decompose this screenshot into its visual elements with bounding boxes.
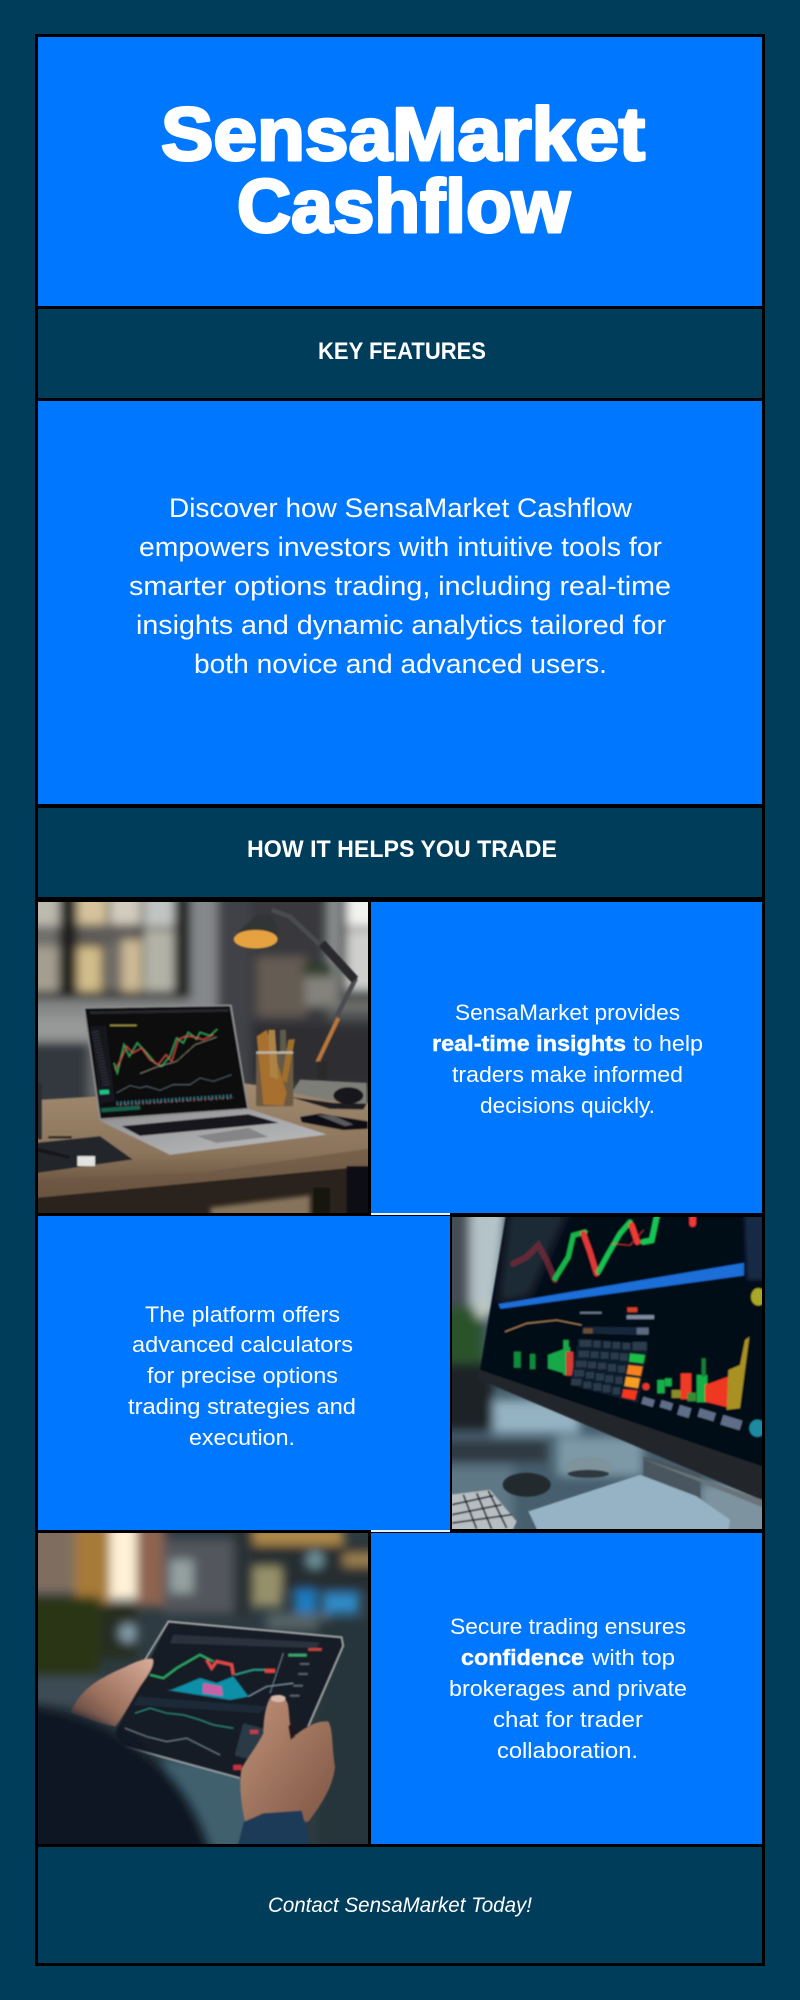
- lamp: [234, 910, 367, 1110]
- text: real-time insights: [432, 1000, 703, 1118]
- panel: how it helps heading: [38, 808, 762, 897]
- panel: introduction: [38, 401, 762, 804]
- tablet: [115, 1621, 343, 1779]
- text: real-time insights: traders make informed: [452, 1062, 683, 1087]
- intro text block: both novice and advanced users.: [194, 649, 607, 679]
- tablet charts: [167, 1676, 248, 1700]
- panel: footer: [38, 1847, 762, 1963]
- heading: how it helps you trade: HOW IT HELPS YOU TRADE: [247, 836, 557, 863]
- laptop: [83, 1004, 327, 1155]
- left hand: [71, 1659, 153, 1727]
- panel: real-time insights text: [371, 902, 762, 1213]
- intro text block: empowers investors with intuitive tools for: [139, 532, 662, 562]
- text: advanced calculators: The platform offers: [145, 1302, 340, 1327]
- pencil cup: [256, 1030, 295, 1106]
- panel: advanced calculators text: [38, 1216, 450, 1530]
- text: secure trading: confidence: [461, 1645, 584, 1670]
- calculator: [570, 1307, 654, 1403]
- text: secure trading: chat for trader: [493, 1707, 644, 1732]
- monitor stand: [643, 1456, 702, 1546]
- monitor: [477, 1200, 777, 1513]
- text: secure trading: Secure trading ensures: [450, 1614, 686, 1639]
- white divider: [371, 1213, 450, 1215]
- text: advanced calculators: [128, 1302, 356, 1450]
- text: real-time insights: decisions quickly.: [480, 1093, 655, 1118]
- text: secure trading: brokerages and private: [449, 1676, 687, 1701]
- notebook: [20, 1136, 133, 1175]
- text: real-time insights: to help: [633, 1031, 703, 1056]
- text: secure trading: with top: [591, 1645, 675, 1670]
- heading: key features: KEY FEATURES: [318, 338, 486, 365]
- intro text block: [129, 493, 671, 679]
- upper candle chart: [513, 1217, 693, 1280]
- text: real-time insights: SensaMarket provides: [455, 1000, 680, 1025]
- right hand: [240, 1695, 335, 1822]
- image: hands holding tablet: [38, 1533, 368, 1844]
- panel: secure trading text: [371, 1533, 762, 1844]
- text: advanced calculators: advanced calculators: [132, 1332, 353, 1357]
- intro text block: insights and dynamic analytics tailored for: [136, 610, 666, 640]
- shoulder silhouette: [20, 1703, 213, 1863]
- title: Cashflow: [237, 164, 571, 248]
- text: real-time insights: real-time insights: [432, 1031, 626, 1056]
- panel: title header: [38, 37, 762, 306]
- text: advanced calculators: trading strategies and: [128, 1394, 356, 1419]
- lower bars: [505, 1320, 749, 1430]
- text: secure trading: collaboration.: [497, 1738, 638, 1763]
- phone: [300, 1114, 368, 1130]
- image: trading monitor with calculator: [452, 1217, 762, 1529]
- panel: key features heading: [38, 309, 762, 398]
- text: secure trading: [449, 1614, 687, 1763]
- text: advanced calculators: for precise options: [147, 1363, 338, 1388]
- image: laptop on desk: [38, 902, 368, 1213]
- white divider: [371, 1530, 450, 1532]
- footer text: Contact SensaMarket Today!: [268, 1894, 532, 1917]
- desk: [20, 1083, 387, 1233]
- title: [161, 92, 645, 248]
- intro text block: smarter options trading, including real-time: [129, 571, 671, 601]
- coasters and keyboard: [437, 1456, 730, 1546]
- intro text block: Discover how SensaMarket Cashflow: [169, 493, 633, 523]
- title: SensaMarket: [161, 92, 645, 176]
- text: advanced calculators: execution.: [189, 1425, 295, 1450]
- sleeve: [233, 1811, 316, 1863]
